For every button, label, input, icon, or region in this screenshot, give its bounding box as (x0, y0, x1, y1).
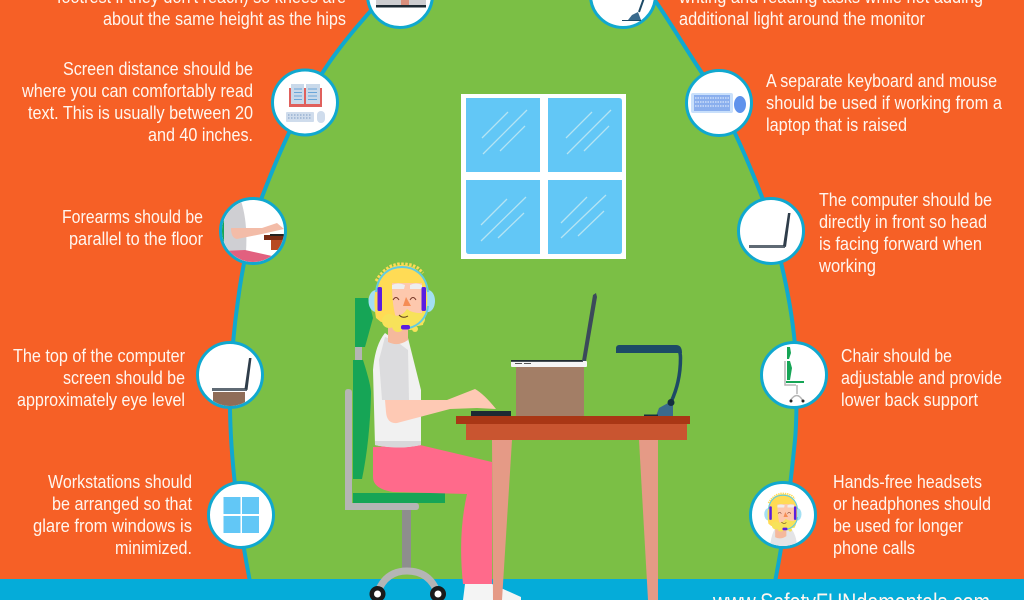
tip: adjustable chair (762, 342, 1002, 410)
icon: window (208, 482, 274, 548)
icon: person with headset (750, 482, 816, 548)
text: chair: lower back support (841, 389, 978, 410)
text: glare: be arranged so that (52, 493, 192, 514)
text: eye level: The top of the computer (13, 345, 185, 366)
desk (456, 416, 690, 600)
text: glare: Workstations should (48, 471, 192, 492)
bottom blue band (0, 579, 1024, 600)
text: eye level: screen should be (63, 367, 185, 388)
tip: task lighting (590, 0, 983, 29)
text: computer: directly in front so head (819, 211, 987, 232)
text: forearms (62, 206, 203, 249)
text: headsets: Hands-free headsets (833, 471, 982, 492)
text: footrest: about the same height as the hips (103, 8, 346, 29)
text: glare: glare from windows is (33, 515, 192, 536)
keyboard on desk (471, 411, 511, 416)
office chair (345, 298, 446, 600)
text: eye level: approximately eye level (17, 389, 185, 410)
tip: computer directly in front (738, 189, 992, 276)
text: chair: adjustable and provide (841, 367, 1002, 388)
text: computer: is facing forward when (819, 233, 982, 254)
text: forearms: Forearms should be (62, 206, 203, 227)
tip: screen eye level (13, 342, 262, 410)
large window (461, 94, 626, 259)
text: chair: Chair should be (841, 345, 952, 366)
icon: footrest (368, 0, 432, 28)
text: headsets (833, 471, 991, 558)
desk lamp (616, 345, 682, 416)
text: headsets: be used for longer (833, 515, 963, 536)
text: eye level (13, 345, 185, 410)
text: forearms: parallel to the floor (69, 228, 203, 249)
text: glare (33, 471, 192, 558)
text: headsets: or headphones should (833, 493, 991, 514)
text: keyboard: laptop that is raised (766, 114, 907, 135)
tip: footrest and knee height (57, 0, 432, 29)
tip: window glare (33, 471, 274, 558)
text: screen distance: text. This is usually between 20 (28, 102, 253, 123)
tip: forearms (62, 198, 286, 265)
green dome with blue outline (230, 0, 796, 582)
text: screen distance: Screen distance should be (63, 58, 253, 79)
text: glare: minimized. (115, 537, 192, 558)
text: lighting: additional light around the monitor (679, 8, 925, 29)
text: headsets: phone calls (833, 537, 915, 558)
icon: chair (762, 342, 826, 408)
text: screen distance: where you can comfortably read (21, 80, 253, 101)
tip: separate keyboard and mouse (686, 70, 1003, 136)
icon: book and keyboard (272, 70, 338, 135)
text: chair (841, 345, 1002, 410)
raised laptop on box (511, 293, 597, 416)
icon: raised laptop (198, 342, 262, 408)
text: footrest (57, 0, 346, 29)
text: keyboard (766, 70, 1003, 135)
text: computer: The computer should be (819, 189, 992, 210)
person wearing a headset (368, 264, 521, 600)
icon: laptop (738, 198, 804, 264)
text: lighting (678, 0, 983, 29)
icon: forearm on desk (220, 198, 286, 265)
tip: headsets (750, 471, 991, 558)
text: computer (818, 189, 992, 276)
icon: keyboard and mouse (686, 70, 752, 136)
tip: screen distance (21, 58, 338, 145)
icon: lamp (590, 0, 656, 28)
text: computer: working (818, 255, 876, 276)
text: screen distance (21, 58, 253, 145)
text: screen distance: and 40 inches. (148, 124, 253, 145)
